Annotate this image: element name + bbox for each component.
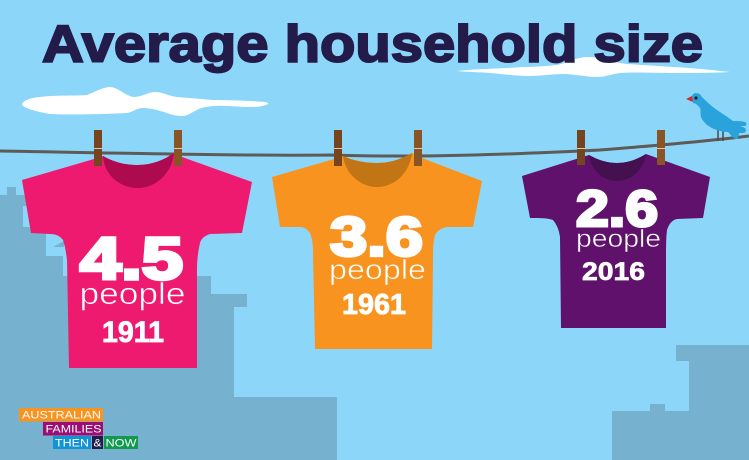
label: people xyxy=(329,254,426,285)
collar xyxy=(343,153,412,187)
logo: Australian Families Then & Now: FAMILIES xyxy=(46,424,102,436)
pegs xyxy=(577,130,665,165)
shirt body xyxy=(272,153,482,349)
right cloud xyxy=(457,57,730,77)
left cloud xyxy=(22,87,268,116)
value: 2.6 xyxy=(576,180,658,237)
shirt body xyxy=(22,153,252,368)
bird eye xyxy=(694,96,698,100)
pegs xyxy=(94,130,182,166)
bird body xyxy=(692,93,746,139)
collar xyxy=(103,153,174,188)
shirt: orange 1961 xyxy=(272,130,482,349)
left city buildings xyxy=(0,187,337,460)
logo: Australian Families Then & Now: NOW xyxy=(106,438,137,450)
bird beak xyxy=(686,96,693,102)
clothesline xyxy=(0,136,749,156)
year: 2016 xyxy=(582,258,645,286)
label: people xyxy=(80,276,186,311)
right city buildings xyxy=(612,345,749,460)
label: people xyxy=(576,225,661,253)
logo line 3 xyxy=(53,436,91,449)
logo line 2 xyxy=(43,422,103,436)
logo line 1 xyxy=(19,408,103,422)
bird xyxy=(686,93,746,141)
logo: Australian Families Then & Now: & xyxy=(94,438,102,450)
year: 1911 xyxy=(102,316,164,349)
shirt: pink 1911 xyxy=(22,130,252,368)
shirt body xyxy=(522,154,710,328)
title: Average household size xyxy=(42,16,703,74)
pegs xyxy=(334,130,422,166)
bird legs xyxy=(718,129,723,141)
year: 1961 xyxy=(342,289,406,321)
shirt: purple 2016 xyxy=(522,130,710,328)
value: 3.6 xyxy=(330,206,423,268)
logo: Australian Families Then & Now: THEN xyxy=(55,438,89,450)
value: 4.5 xyxy=(80,226,183,292)
collar xyxy=(589,154,646,181)
logo: Australian Families Then & Now xyxy=(19,408,138,450)
logo: Australian Families Then & Now: AUSTRALIAN xyxy=(22,410,101,422)
